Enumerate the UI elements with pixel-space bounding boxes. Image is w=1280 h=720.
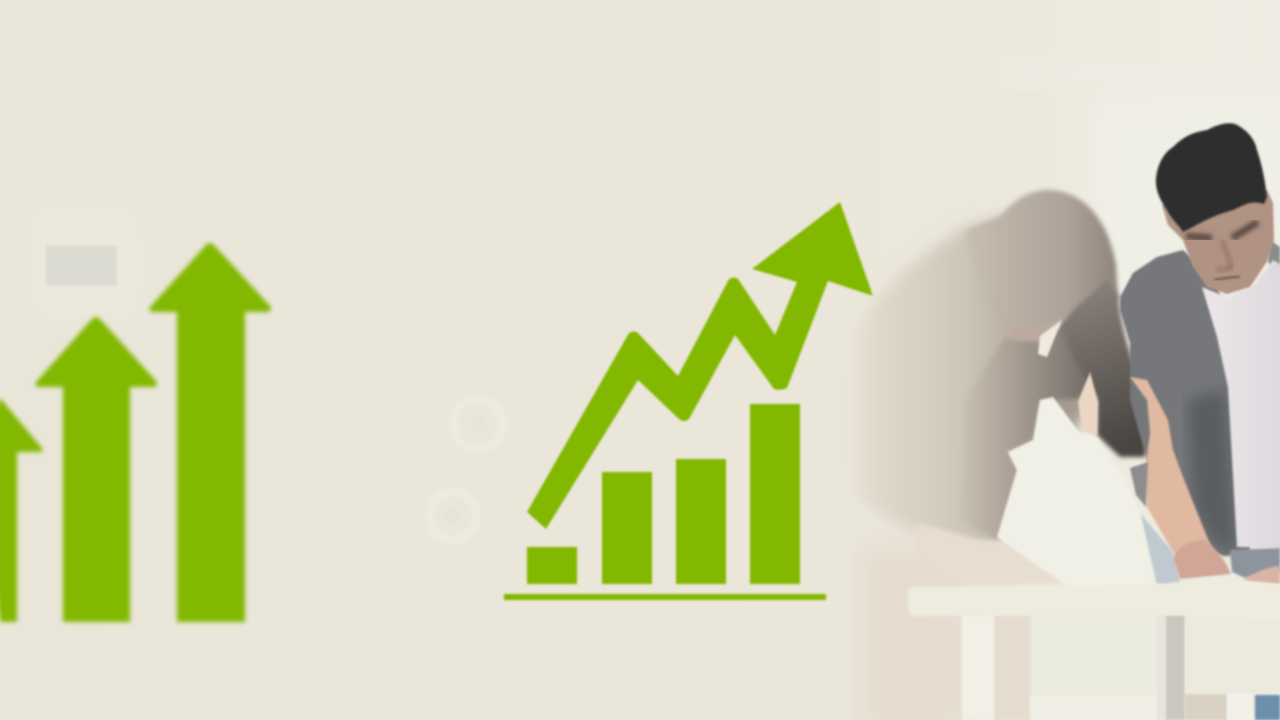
illustration: people at a table — [825, 123, 1280, 720]
chart: central bar chart with arrow — [504, 202, 873, 600]
chart baseline — [504, 594, 826, 600]
man jacket shadow — [1187, 390, 1236, 552]
hand right — [1243, 566, 1280, 584]
woman arm — [1130, 377, 1212, 560]
icon: faint circle upper — [453, 399, 503, 449]
bar 4 — [750, 404, 800, 584]
man hair — [1156, 123, 1267, 232]
jeans patch — [1140, 513, 1180, 584]
blue floor patch — [1255, 695, 1280, 720]
paper — [997, 397, 1155, 587]
bar 1 — [527, 547, 577, 584]
white leg — [1227, 694, 1253, 720]
icon: short cut-off arrow — [0, 398, 43, 622]
man neck and face — [1162, 190, 1274, 294]
man nose shadow — [1216, 240, 1232, 270]
background: pale wall band — [1000, 58, 1280, 88]
under-drawer shade — [1185, 694, 1227, 720]
icon: middle arrow — [35, 317, 157, 622]
table centre panel — [1030, 615, 1158, 695]
woman inner arm — [1078, 372, 1098, 436]
icon: faint circle lower — [429, 492, 477, 540]
man mouth — [1214, 276, 1240, 280]
table lower slats — [1030, 695, 1158, 720]
table drawer — [1185, 618, 1280, 693]
woman hair lower — [1060, 280, 1150, 457]
table post light — [1157, 615, 1167, 720]
man jacket right — [1268, 240, 1280, 275]
table underside shade — [993, 615, 1033, 720]
woman face — [1008, 310, 1072, 340]
hand left — [1173, 540, 1231, 579]
faint grey label box — [46, 246, 117, 286]
woman lower fade — [860, 545, 970, 720]
background: pale wall behind man — [1090, 95, 1280, 315]
table — [908, 584, 1280, 720]
icon: tall arrow — [149, 243, 271, 622]
table post — [1166, 615, 1185, 720]
panel: left arrows group — [0, 243, 271, 622]
trend arrow — [527, 202, 873, 529]
woman forearm left — [916, 525, 1062, 586]
table leg left — [962, 615, 994, 720]
woman collar — [1038, 320, 1062, 357]
woman dark top — [960, 320, 1095, 540]
woman hair — [967, 190, 1118, 340]
table top — [908, 584, 1280, 616]
man eye shadows — [1186, 222, 1258, 238]
bar 3 — [676, 459, 726, 584]
bar 2 — [602, 472, 652, 584]
man jacket — [1120, 250, 1250, 556]
watch — [1130, 462, 1148, 507]
blue-grey cloth — [1230, 548, 1280, 578]
man shirt — [1202, 260, 1280, 548]
background: faint glow behind label — [30, 205, 140, 320]
woman body — [825, 210, 1095, 550]
